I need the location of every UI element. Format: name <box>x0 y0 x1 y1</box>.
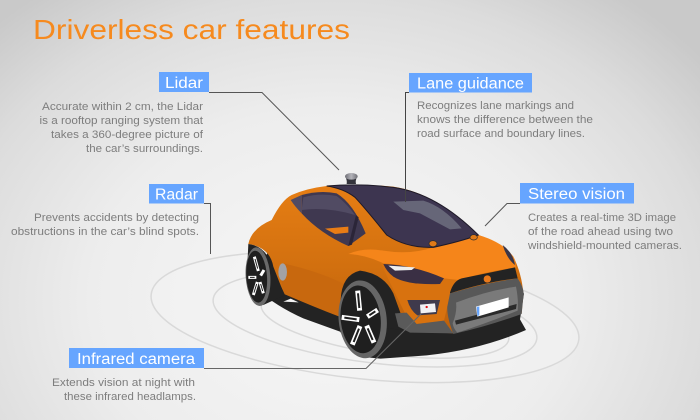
rear quarter window <box>291 195 302 213</box>
lane guidance label: Lane guidance <box>417 76 524 92</box>
lidar text: the car’s surroundings. <box>86 143 203 155</box>
door pillar <box>348 215 359 246</box>
front corner panel <box>380 262 458 324</box>
callout: lidar <box>40 72 209 155</box>
lidar text: is a rooftop ranging system that <box>40 115 203 127</box>
car shadow and underbody <box>253 247 526 359</box>
underbody glint <box>283 299 299 302</box>
lane guidance text: road surface and boundary lines. <box>417 128 585 140</box>
leader: lidar <box>209 92 339 170</box>
infrared camera label: Infrared camera <box>77 351 195 368</box>
stereo vision label: Stereo vision <box>528 186 625 203</box>
lidar label: Lidar <box>165 75 203 92</box>
rear arch <box>247 244 285 305</box>
mirror <box>325 227 348 234</box>
stereo vision label <box>520 183 634 204</box>
callout: radar <box>11 184 204 238</box>
badge <box>484 275 491 283</box>
radar text: Prevents accidents by detecting <box>34 212 199 224</box>
radar label: Radar <box>155 186 198 204</box>
leader: infrared camera <box>204 314 421 368</box>
infrared camera text <box>52 377 196 403</box>
infrared dot <box>425 306 428 308</box>
radar label <box>149 184 204 204</box>
stereo vision text: Creates a real-time 3D image <box>528 212 676 224</box>
rear wheel <box>244 247 272 307</box>
bumper panel <box>453 287 518 333</box>
lidar text: Accurate within 2 cm, the Lidar <box>42 101 203 113</box>
bumper corner <box>395 313 453 333</box>
bumper <box>447 278 524 334</box>
hood <box>348 235 516 280</box>
car body side <box>248 185 523 333</box>
side window <box>302 192 366 246</box>
infrared camera label <box>69 348 204 368</box>
lidar text <box>40 101 204 155</box>
lidar text: takes a 360-degree picture of <box>51 129 204 141</box>
grille <box>450 267 518 293</box>
bumper slit <box>455 304 517 325</box>
leader: radar <box>204 204 210 254</box>
callout: infrared camera <box>52 348 204 403</box>
ground rings <box>145 233 585 401</box>
lidar label <box>159 72 209 92</box>
far headlight <box>503 245 515 265</box>
headlight glint <box>388 266 415 271</box>
roof and windshield <box>327 185 478 247</box>
infrared lamp housing <box>407 300 440 315</box>
title: Driverless car features <box>33 14 350 45</box>
front arch <box>341 271 407 330</box>
front wheel <box>335 278 391 361</box>
windshield reflection <box>393 201 462 229</box>
headlight <box>383 264 444 284</box>
stereo vision text: of the road ahead using two <box>528 226 673 238</box>
stereo vision text: windshield-mounted cameras. <box>527 240 682 252</box>
lane guidance text: knows the difference between the <box>417 114 593 126</box>
side window highlight <box>302 195 355 215</box>
lane guidance text: Recognizes lane markings and <box>417 100 574 112</box>
infrared camera text: these infrared headlamps. <box>64 391 196 403</box>
lane guidance text <box>417 100 593 140</box>
stereo vision text <box>527 212 682 252</box>
radar text: obstructions in the car’s blind spots. <box>11 226 199 238</box>
callout: lane guidance <box>409 73 593 140</box>
infrared lamp <box>420 303 436 313</box>
plate strip <box>477 306 479 316</box>
callout: stereo vision <box>520 183 682 252</box>
lower side panel <box>281 263 344 317</box>
lidar sensor <box>345 173 358 184</box>
infrared camera text: Extends vision at night with <box>52 377 195 389</box>
leader: lane guidance <box>406 92 409 202</box>
windshield cameras <box>429 235 477 247</box>
license plate <box>476 297 509 317</box>
rear side marker <box>278 263 287 281</box>
radar text <box>11 212 199 238</box>
car illustration <box>244 173 526 361</box>
leader: stereo vision <box>485 204 520 226</box>
